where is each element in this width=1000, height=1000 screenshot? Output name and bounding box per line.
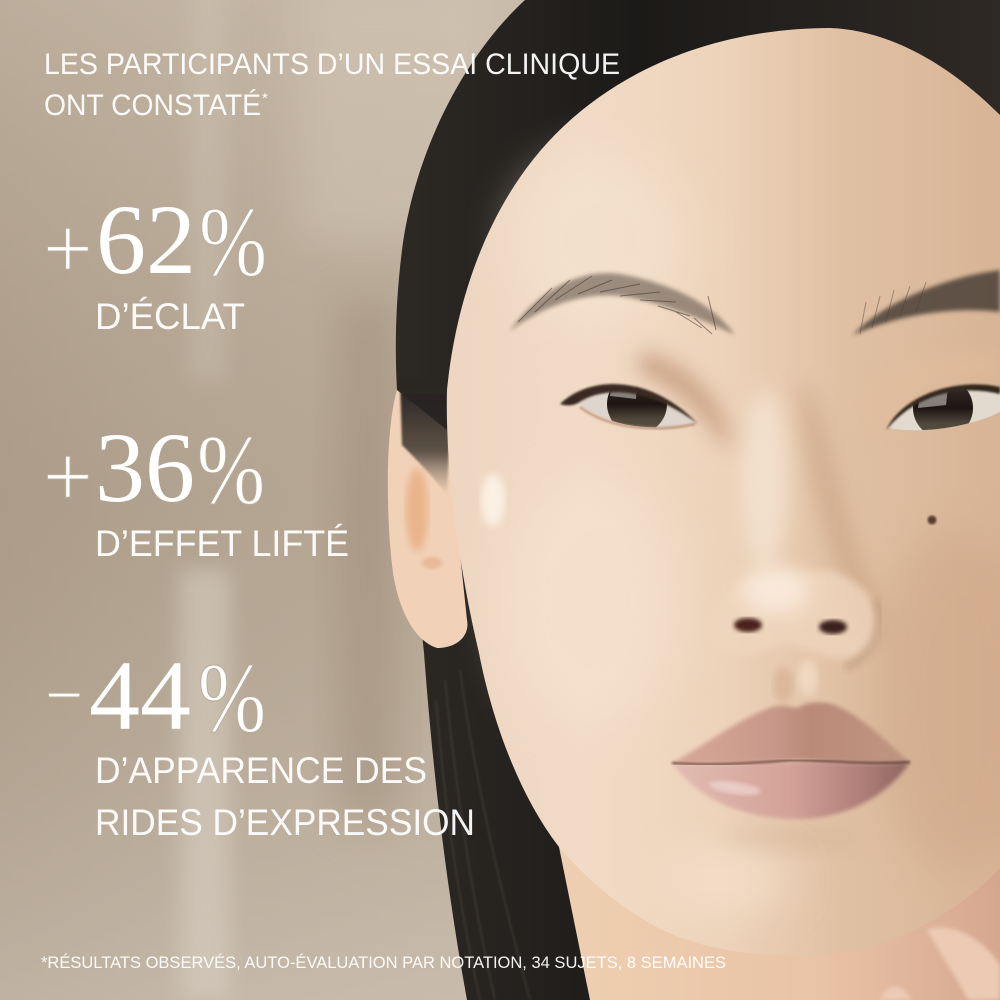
eye socket shading right — [860, 356, 1000, 440]
face — [447, 28, 1000, 955]
stat: +62%: + — [43, 201, 93, 298]
portrait photo — [388, 0, 1000, 1000]
stat: +36% — [43, 412, 349, 564]
hand — [880, 927, 1000, 1000]
stat: +36%: D’EFFET LIFTÉ — [95, 523, 349, 564]
nose bridge highlight — [741, 390, 789, 570]
cheek glow — [500, 470, 680, 730]
stat: +62%: D’ÉCLAT — [95, 296, 245, 337]
stat: +36%: 36 — [95, 412, 195, 523]
stat: +36%: + — [43, 429, 93, 526]
nose — [708, 566, 878, 668]
title: ONT CONSTATÉ — [44, 89, 261, 122]
nose side shadow — [800, 380, 890, 640]
lips — [672, 702, 910, 819]
stat: -44% — [45, 640, 475, 843]
mole — [928, 516, 936, 524]
stat: +36%: % — [197, 414, 265, 525]
stat: +62%: 62 — [96, 184, 196, 295]
stat: +62%: % — [199, 186, 267, 297]
right cheek shade — [870, 530, 1000, 870]
eye left — [559, 382, 698, 430]
eye right — [885, 382, 1000, 430]
forehead highlight — [510, 150, 690, 330]
neck — [559, 800, 1000, 1000]
hair — [396, 0, 1000, 1000]
stat: -44%: 44 — [89, 640, 191, 751]
stat: -44%: D’APPARENCE DES — [95, 750, 427, 791]
stat: +62% — [43, 184, 267, 337]
stat: -44%: RIDES D’EXPRESSION — [95, 802, 475, 843]
stat: -44%: − — [45, 651, 83, 738]
title: LES PARTICIPANTS D’UN ESSAI CLINIQUE — [44, 48, 620, 81]
ear — [388, 380, 467, 648]
philtrum — [773, 660, 818, 703]
chin shadow and highlight — [670, 826, 860, 910]
eyebrow left — [510, 273, 735, 335]
stat: -44%: % — [198, 642, 266, 753]
hair strands — [436, 670, 530, 1000]
footnote: *RÉSULTATS OBSERVÉS, AUTO-ÉVALUATION PAR NOTATION, 34 SUJETS, 8 SEMAINES — [41, 953, 726, 972]
title: * — [262, 90, 268, 107]
eye socket shading left — [640, 352, 732, 450]
eyebrow right — [853, 270, 1000, 335]
cheek highlight — [481, 474, 505, 526]
title — [44, 48, 620, 122]
